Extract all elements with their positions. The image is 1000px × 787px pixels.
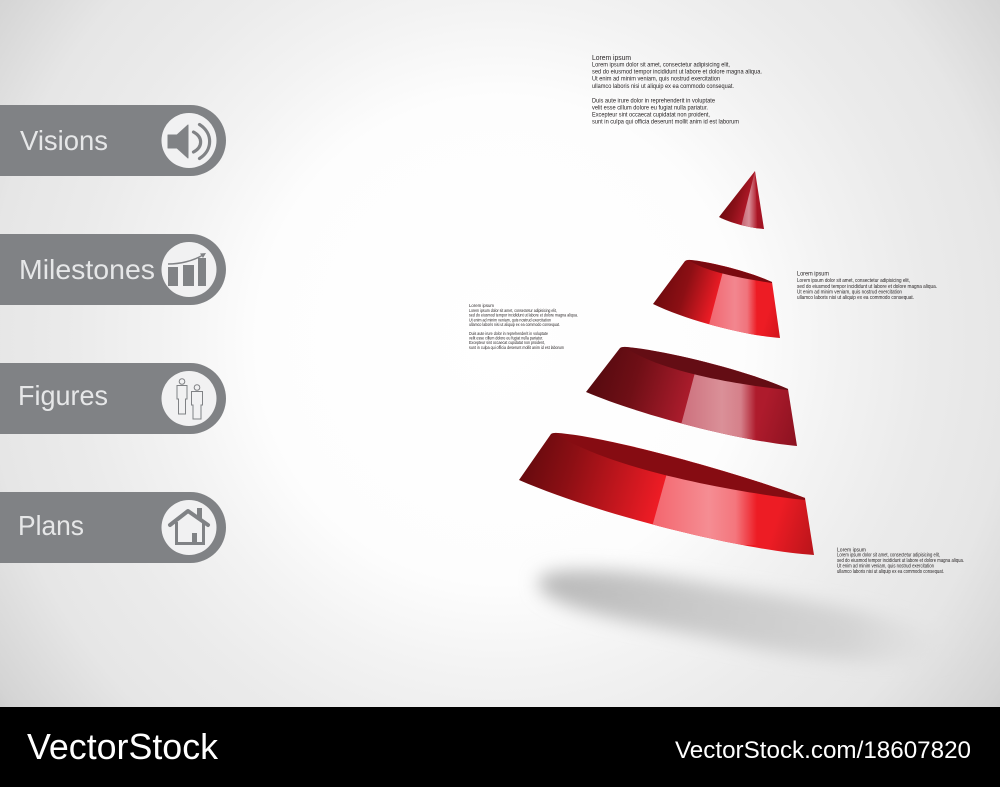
text block: tier 3: Excepteur sint occaecat cupidatat non proident, (469, 340, 545, 345)
text block: tier 3: Lorem ipsum (469, 303, 494, 308)
pyramid tier 1: cone tip (719, 171, 764, 231)
text block: top: velit esse cillum dolore eu fugiat nulla pariatur. (592, 104, 708, 112)
panel: Visions (0, 105, 226, 176)
footer logo: VectorStock (27, 726, 219, 767)
text block: tier 3: sed do eiusmod tempor incididunt ut labore et dolore magna aliqua. (469, 312, 578, 318)
pyramid tier 3: ring (586, 347, 797, 446)
text block: tier 2: Ut enim ad minim veniam, quis nostrud exercitation (797, 290, 902, 296)
text block: tier 2: sed do eiusmod tempor incididunt ut labore et dolore magna aliqua. (797, 284, 937, 290)
text block: top: Ut enim ad minim veniam, quis nostrud exercitation (592, 76, 720, 82)
footer bar (0, 707, 1000, 787)
icon: people (162, 371, 216, 426)
label: Plans: Plans (18, 510, 84, 541)
pyramid tier 2: ring (653, 260, 780, 340)
text block: top: Duis aute irure dolor in reprehenderit in voluptate (592, 98, 715, 104)
panel: Figures (0, 363, 226, 434)
text block: top: Lorem ipsum dolor sit amet, consectetur adipisicing elit, (592, 62, 730, 68)
text block: top: Lorem ipsum (592, 53, 631, 62)
text block: tier 3 (469, 303, 578, 350)
text block: tier 3: velit esse cillum dolore eu fugiat nulla pariatur. (469, 336, 543, 340)
icon: house (162, 500, 216, 555)
icon: bar chart (162, 242, 216, 297)
label: Milestones: Milestones (19, 254, 155, 285)
text block: tier 2: Lorem ipsum (797, 270, 829, 278)
icon: speaker (162, 113, 216, 168)
text block: tier 3: ullamco laboris nisi ut aliquip ex ea commodo consequat. (469, 322, 560, 327)
floor shadow (538, 570, 955, 662)
text block: top: Excepteur sint occaecat cupidatat non proident, (592, 112, 710, 118)
panel: Milestones (0, 234, 226, 305)
text block: top: sunt in culpa qui officia deserunt mollit anim id est laborum (592, 118, 739, 126)
text block: tier 4: Lorem ipsum (837, 548, 866, 554)
label: Figures: Figures (18, 380, 108, 411)
text block: tier 3: Lorem ipsum dolor sit amet, consectetur adipisicing elit, (469, 308, 557, 313)
text block: tier 2: Lorem ipsum dolor sit amet, consectetur adipisicing elit, (797, 278, 910, 284)
label: Visions: Visions (20, 125, 108, 156)
text block: tier 4: Ut enim ad minim veniam, quis nostrud exercitation (837, 564, 934, 570)
text block: tier 3: Duis aute irure dolor in reprehenderit in voluptate (469, 331, 549, 336)
text block: top (592, 53, 762, 126)
text block: tier 4: ullamco laboris nisi ut aliquip ex ea commodo consequat. (837, 569, 944, 575)
text block: tier 4 (837, 548, 964, 575)
text block: tier 3: sunt in culpa qui officia deserunt mollit anim id est laborum (469, 345, 564, 350)
text block: tier 3: Ut enim ad minim veniam, quis nostrud exercitation (469, 318, 552, 322)
text block: tier 2: ullamco laboris nisi ut aliquip ex ea commodo consequat. (797, 295, 914, 301)
text block: tier 2 (797, 270, 937, 301)
pyramid tier 4: bottom ring (519, 433, 814, 555)
text block: top: ullamco laboris nisi ut aliquip ex ea commodo consequat. (592, 83, 734, 90)
text block: tier 4: Lorem ipsum dolor sit amet, consectetur adipisicing elit, (837, 552, 940, 558)
footer image id: VectorStock.com/18607820 (675, 737, 971, 764)
panel: Plans (0, 492, 226, 563)
text block: top: sed do eiusmod tempor incididunt ut labore et dolore magna aliqua. (592, 68, 762, 76)
text block: tier 4: sed do eiusmod tempor incididunt ut labore et dolore magna aliqua. (837, 558, 964, 564)
